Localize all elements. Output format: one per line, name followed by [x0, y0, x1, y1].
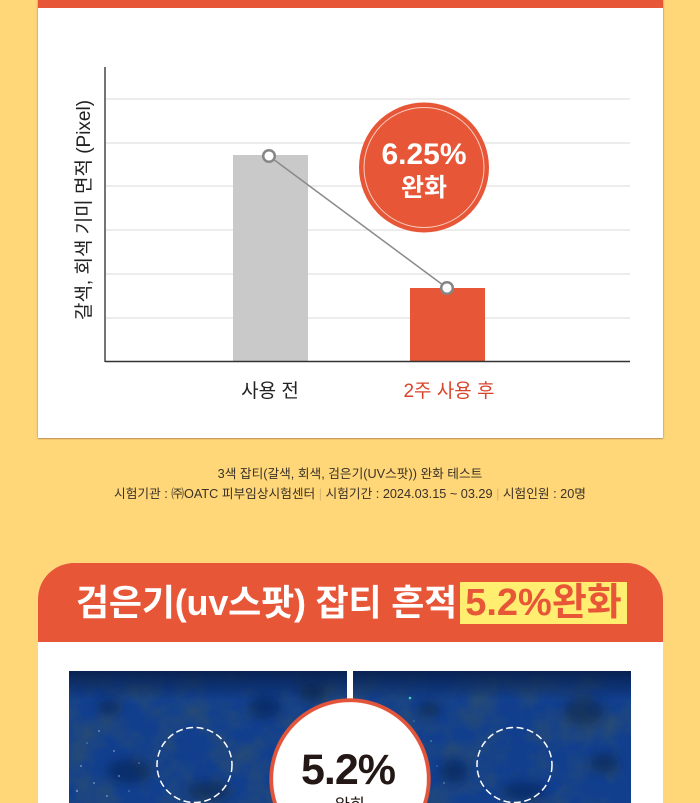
test note: 3색 잡티(갈색, 회색, 검은기(UV스팟)) 완화 테스트 [218, 467, 482, 481]
bar: after [410, 288, 485, 361]
badge: 5.2% [269, 698, 431, 803]
callout: 6.25%: 완화 [401, 174, 447, 202]
bar chart [73, 67, 630, 402]
x label: after: 2주 사용 후 [403, 380, 495, 402]
test note: 시험기관 : ㈜OATC 피부임상시험센터 | 시험기간 : 2024.03.15 ~ 03.29 | 시험인원 : 20명 [114, 487, 586, 501]
heading: 검은기(uv스팟) 잡티 흔적 [76, 582, 457, 623]
bar: before [233, 155, 308, 361]
panel: UV spot card [38, 563, 663, 803]
dashed circle: left [157, 728, 232, 802]
photos: before and after [69, 671, 631, 803]
callout: 6.25%: 6.25% [381, 138, 467, 171]
right photo [353, 671, 631, 803]
panel: chart card [38, 0, 663, 438]
x label: before: 사용 전 [241, 380, 299, 402]
top orange band [38, 0, 663, 8]
callout: 6.25% [359, 102, 489, 232]
dashed circle: right [477, 728, 552, 802]
test note [114, 467, 586, 501]
heading highlight: 5.2%완화 [465, 582, 622, 624]
header band [38, 563, 663, 642]
y axis title: 갈색, 회색 기미 면적 (Pixel) [73, 100, 95, 320]
badge number: 5.2% [301, 746, 395, 794]
left photo [69, 671, 347, 803]
